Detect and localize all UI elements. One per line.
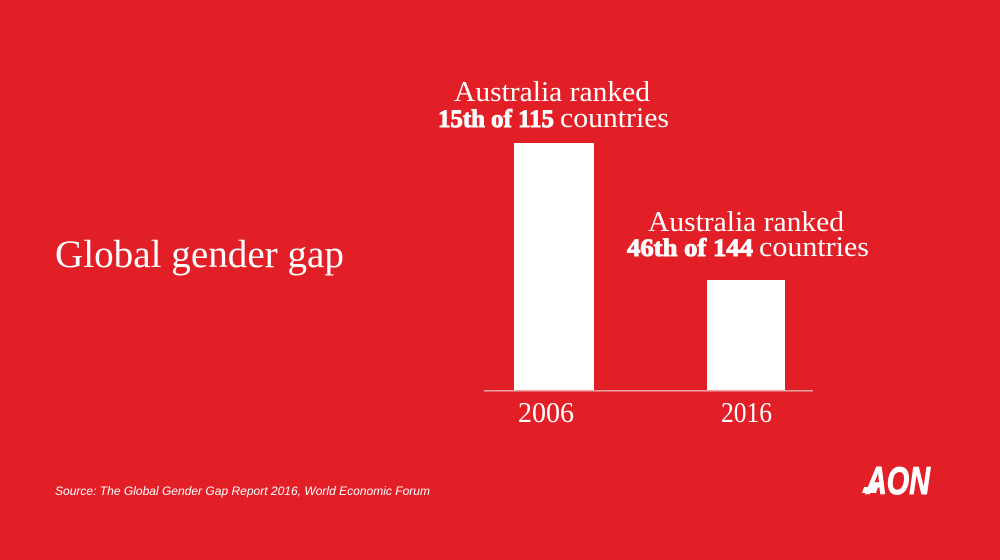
label: 2016: 2016 <box>721 398 772 429</box>
callout: 2016 rank: Australia ranked <box>648 206 845 238</box>
bar chart <box>484 143 813 429</box>
callout: 2016 rank: countries <box>759 231 869 263</box>
callout: 2006 rank <box>438 76 669 134</box>
callout: 2016 rank: 46th of 144 <box>627 235 754 262</box>
callout: 2006 rank: countries <box>560 102 669 134</box>
source note: Source: The Global Gender Gap Report 2016, World Economic Forum <box>55 484 430 498</box>
bar: 2016 <box>707 280 785 391</box>
title: Global gender gap <box>55 233 344 276</box>
logo: Aon: AON <box>865 460 931 503</box>
bar: 2006 <box>514 143 594 391</box>
callout: 2006 rank: 15th of 115 <box>438 106 554 133</box>
callout: 2016 rank <box>627 206 869 263</box>
callout: 2006 rank: Australia ranked <box>454 76 651 108</box>
label: 2006: 2006 <box>518 398 574 429</box>
